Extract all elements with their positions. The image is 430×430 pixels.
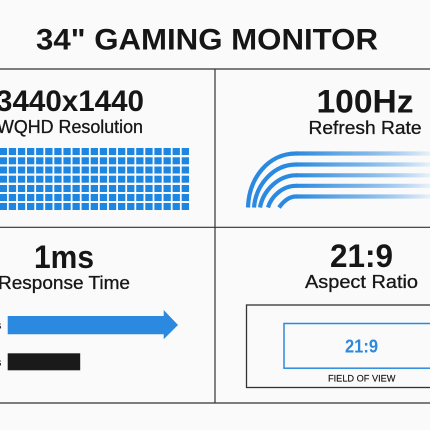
resolution value: 3440x1440	[0, 85, 144, 118]
panel: aspect ratio	[246, 238, 430, 388]
bar: slower response	[8, 353, 80, 370]
arrow: fast response	[8, 310, 178, 339]
field of view caption: FIELD OF VIEW	[328, 374, 396, 384]
refresh rate value: 100Hz	[316, 84, 414, 120]
field of view box	[284, 324, 430, 368]
refresh rate label: Refresh Rate	[308, 118, 422, 138]
monitor outline	[246, 305, 430, 388]
title: 34" GAMING MONITOR	[36, 24, 378, 56]
aspect ratio value: 21:9	[330, 238, 393, 274]
panel: refresh rate	[248, 84, 430, 208]
panel: response time	[0, 239, 178, 370]
aspect ratio label: Aspect Ratio	[305, 272, 418, 292]
icon: motion lines	[248, 154, 430, 208]
resolution label: WQHD Resolution	[0, 117, 143, 137]
box ratio text: 21:9	[345, 336, 378, 356]
response time label: Response Time	[0, 273, 130, 293]
response time value: 1ms	[34, 239, 94, 275]
panel: resolution	[0, 85, 189, 210]
pixel grid icon	[0, 148, 189, 210]
clipped bar labels	[0, 320, 2, 369]
